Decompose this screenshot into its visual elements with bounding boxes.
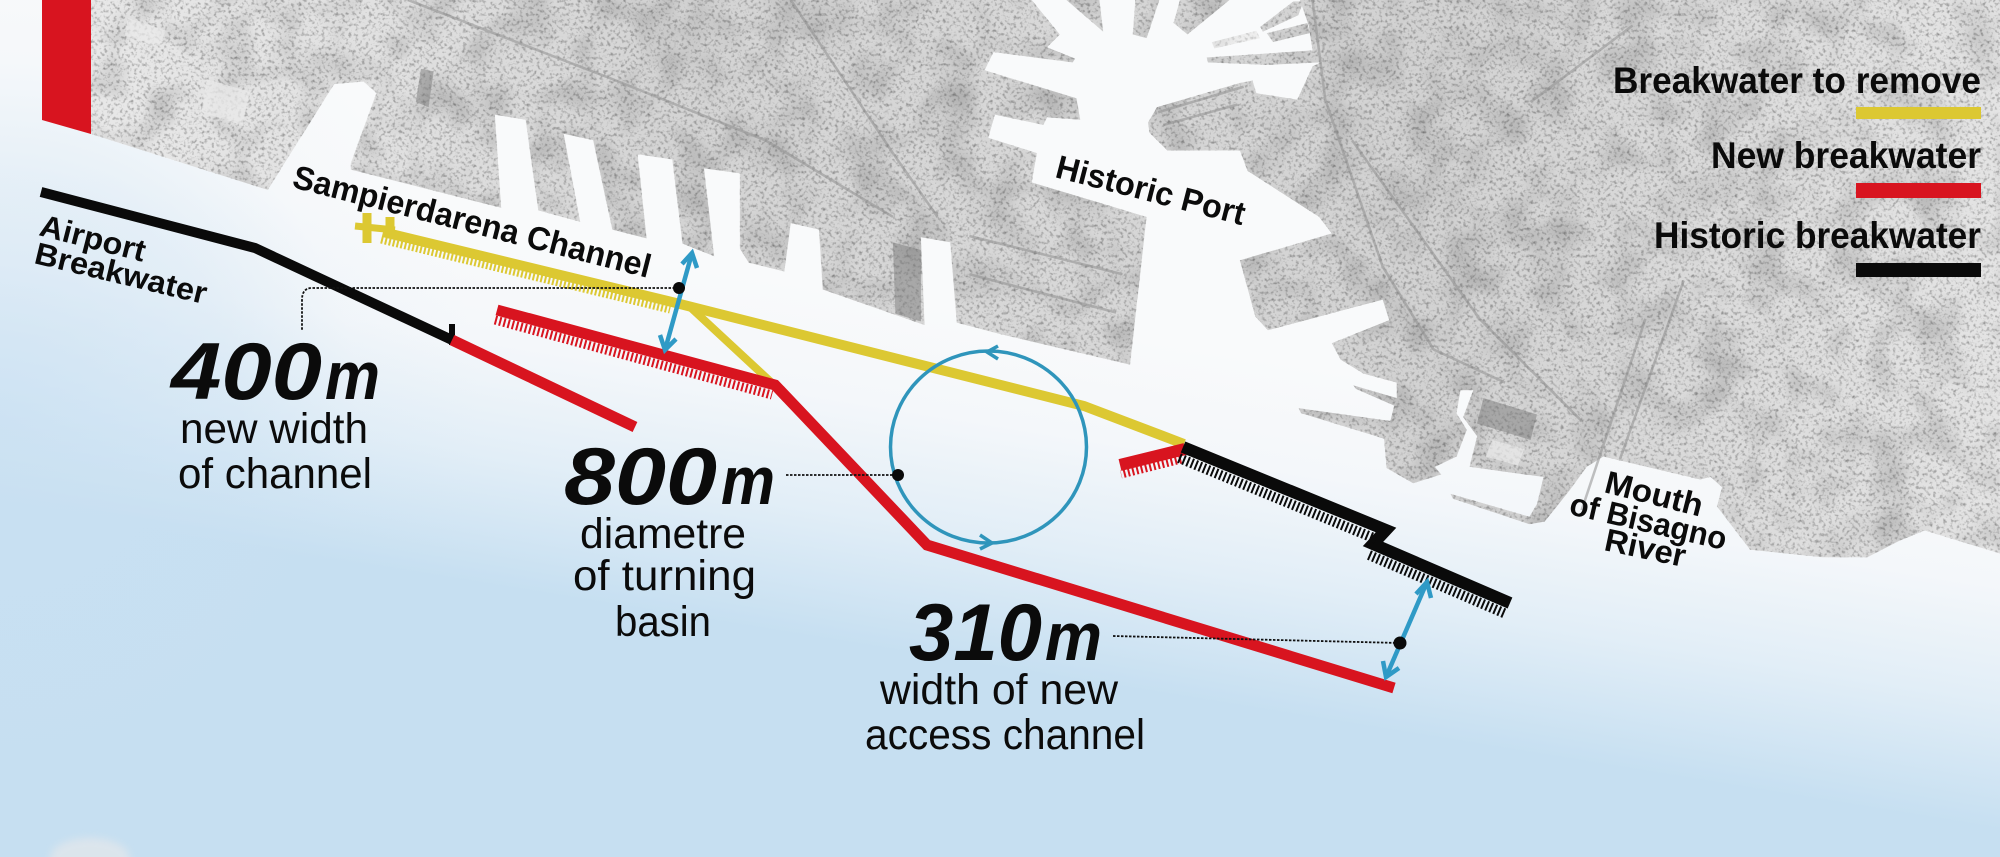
400m leader line [302, 282, 685, 330]
stat: 800m diametre of turning basin: 800 [564, 432, 717, 522]
label: Mouth of Bisagno River: Mouth [1601, 464, 1707, 523]
red corner bar [42, 0, 91, 134]
historic breakwater: black line with ticks [1179, 447, 1510, 614]
stat: 400m new width of channel: of channel [178, 450, 372, 498]
label: Sampierdarena Channel: Sampierdarena Channel [289, 158, 655, 285]
stat: 400m new width of channel: new width [180, 405, 368, 453]
label: Airport Breakwater [31, 208, 211, 311]
red stub at historic breakwater [1120, 449, 1185, 474]
legend item: historic breakwater [1654, 215, 1981, 277]
turning basin circle with arrowheads [890, 346, 1086, 549]
stat: 800m diametre of turning basin: of turning [573, 552, 756, 600]
stat: 800m diametre of turning basin [564, 432, 775, 646]
city map: grey land of Genoa [91, 0, 2000, 557]
city roads and blocks [408, 0, 1684, 510]
background: left blue tint [0, 0, 600, 857]
legend item: breakwater to remove: Breakwater to remove [1613, 60, 1981, 101]
label: Historic Port: Historic Port [1052, 148, 1249, 232]
310m channel width arrow [1383, 582, 1431, 677]
label: Mouth of Bisagno River: of Bisagno [1566, 486, 1730, 557]
stat: 400m new width of channel: 400 [169, 327, 322, 417]
stat: 800m diametre of turning basin: m [721, 443, 775, 519]
400m channel width arrow [660, 253, 697, 350]
faint white blob bottom left [50, 838, 130, 857]
stat: 800m diametre of turning basin: diametre [580, 510, 746, 558]
stat: 310m width of new access channel: m [1045, 599, 1102, 675]
legend item: breakwater to remove [1613, 60, 1981, 119]
new breakwater: red line extension of airport breakwater [452, 340, 635, 427]
stat: 310m width of new access channel: 310 [909, 588, 1042, 678]
legend [1613, 60, 1981, 277]
stat: 310m width of new access channel [865, 588, 1145, 759]
new breakwater: red line with ticks and long outer run [495, 310, 1394, 688]
800m leader line [786, 469, 904, 481]
stat: 400m new width of channel [169, 327, 380, 498]
label: Mouth of Bisagno River: River [1602, 522, 1689, 574]
stat: 310m width of new access channel: width of new [879, 666, 1119, 714]
stat: 310m width of new access channel: access channel [865, 711, 1145, 759]
airport breakwater: black line [41, 192, 452, 345]
label: Airport Breakwater: Breakwater [31, 236, 211, 311]
stat: 800m diametre of turning basin: basin [615, 598, 711, 646]
breakwater to remove: yellow line [355, 213, 1184, 444]
stat: 400m new width of channel: m [325, 338, 380, 414]
legend item: new breakwater: New breakwater [1711, 135, 1981, 176]
310m leader line [1113, 636, 1406, 650]
legend item: historic breakwater: Historic breakwater [1654, 215, 1981, 256]
label: Mouth of Bisagno River [1566, 464, 1730, 574]
legend item: new breakwater [1711, 135, 1981, 198]
label: Airport Breakwater: Airport [36, 208, 150, 269]
